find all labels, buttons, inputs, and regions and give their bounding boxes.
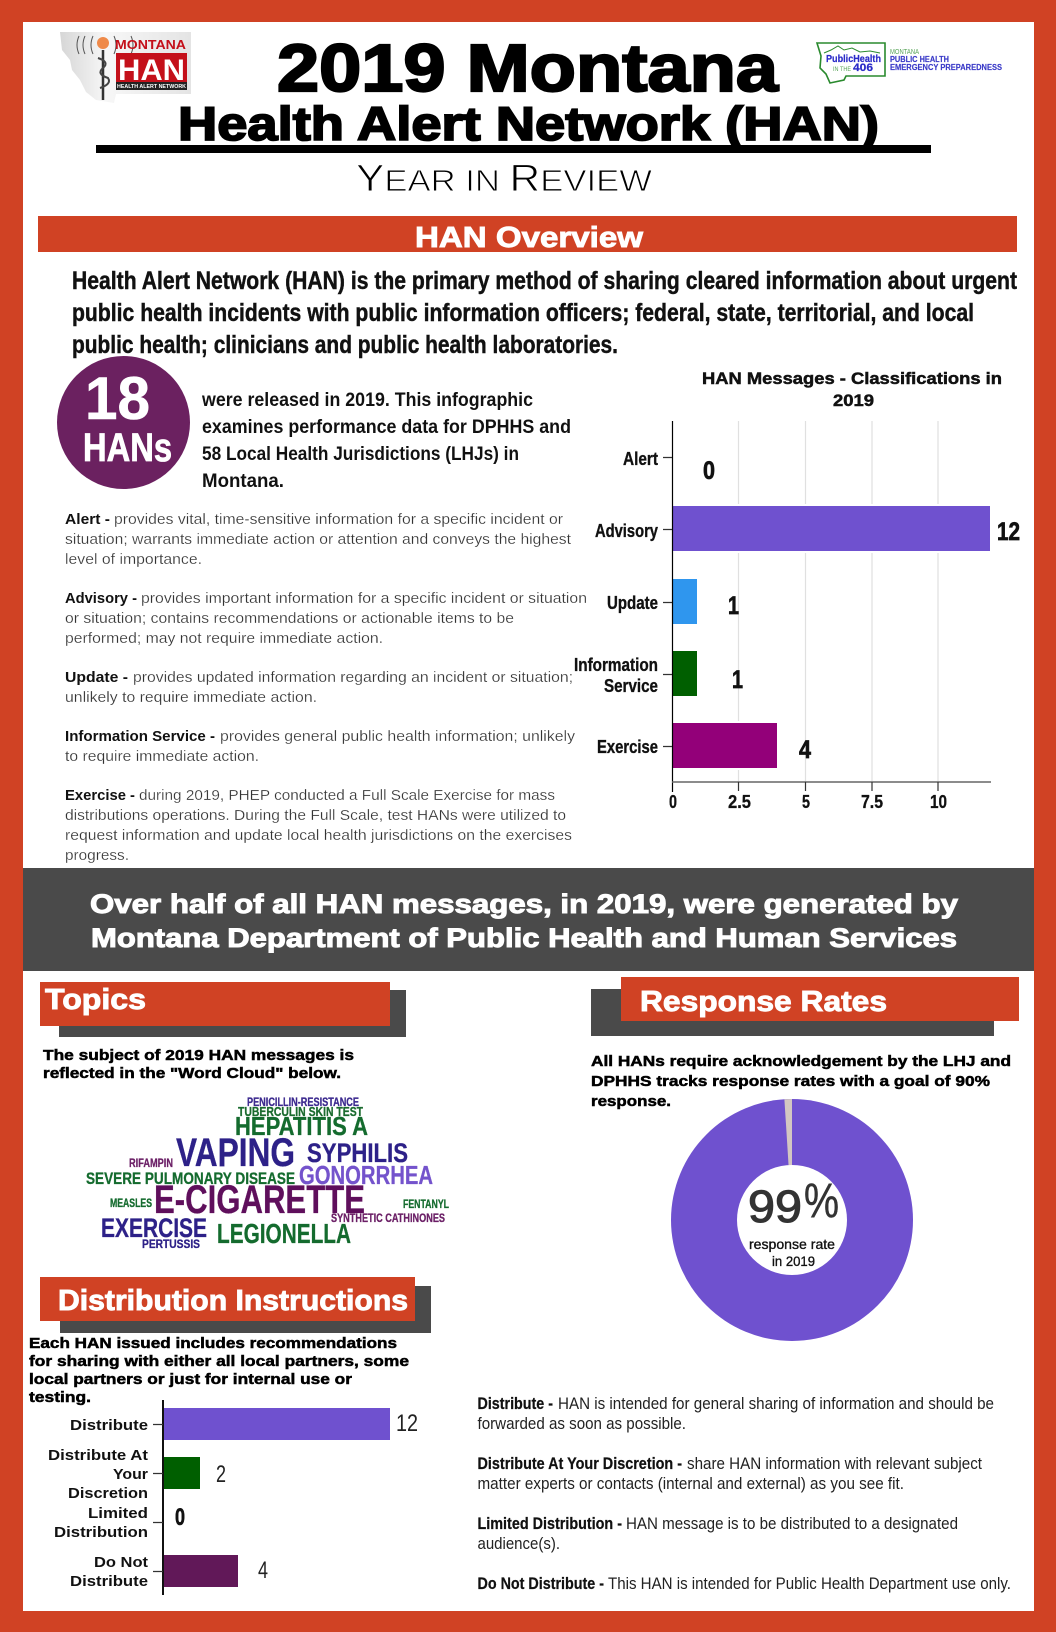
text block: distribution definitions: HAN is intended for general sharing of information and should be xyxy=(558,1394,994,1413)
logo: Montana HAN: HEALTH ALERT NETWORK xyxy=(117,84,186,90)
title: 2019 Montana: 2019 Montana xyxy=(277,31,779,106)
text block: distribution definitions: matter experts or contacts (internal and external) as you see fit. xyxy=(478,1474,904,1493)
logo: Public Health in the 406: PUBLIC HEALTH xyxy=(890,55,949,64)
bar: Distribute xyxy=(164,1408,390,1440)
word cloud: GONORRHEA xyxy=(299,1160,433,1190)
section heading: Distribution Instructions xyxy=(40,1277,431,1333)
definition: Exercise: during 2019, PHEP conducted a Full Scale Exercise for mass xyxy=(139,788,555,804)
section heading: Topics: Topics xyxy=(45,984,146,1016)
bar chart: distribution instructions: Distribution xyxy=(54,1524,148,1541)
text block: topics intro: The subject of 2019 HAN messages is xyxy=(43,1047,354,1064)
logo: Public Health in the 406: MONTANA xyxy=(890,49,919,56)
logo: Montana HAN: HAN xyxy=(118,54,185,87)
bar chart: distribution instructions: Your xyxy=(113,1466,148,1483)
bar chart: distribution instructions: 0 xyxy=(175,1504,185,1531)
word cloud: VAPING xyxy=(176,1131,295,1175)
definition: Advisory: performed; may not require immediate action. xyxy=(65,631,383,647)
bar chart: distribution instructions: Discretion xyxy=(68,1485,148,1502)
bar chart: distribution instructions: Distribute At xyxy=(48,1447,148,1464)
donut chart: 99% response rate: % xyxy=(804,1175,839,1228)
bar chart: HAN classifications: Alert xyxy=(623,448,658,469)
banner: over half of HAN messages: Over half of all HAN messages, in 2019, were generated by xyxy=(90,889,958,919)
section heading: HAN Overview xyxy=(38,216,1017,254)
bar chart: HAN classifications: 7.5 xyxy=(861,792,883,812)
logo: Public Health in the 406: EMERGENCY PREPAREDNESS xyxy=(890,63,1003,72)
bar: Distribute At Your Discretion xyxy=(164,1457,200,1489)
bar chart: distribution instructions: 4 xyxy=(258,1557,268,1584)
bar chart: HAN classifications: 4 xyxy=(799,736,811,764)
definition: Exercise xyxy=(65,788,572,864)
text block: response rates intro: DPHHS tracks response rates with a goal of 90% xyxy=(591,1073,990,1090)
definition: Update: Update - xyxy=(65,670,128,686)
section heading: Distribution Instructions: Distribution Instructions xyxy=(58,1285,408,1317)
logo: Public Health in the 406: 406 xyxy=(853,62,873,74)
text block: distribution definitions: Do Not Distribute - xyxy=(478,1574,604,1593)
bar chart: distribution instructions: 12 xyxy=(396,1410,418,1437)
definition: Advisory xyxy=(65,591,587,647)
text block: release summary xyxy=(201,390,571,492)
bar: Exercise xyxy=(673,723,777,768)
text block: distribution intro: local partners or just for internal use or xyxy=(29,1371,352,1388)
definition: Information Service: Information Service - xyxy=(65,729,215,745)
text block: distribution intro: Each HAN issued includes recommendations xyxy=(29,1335,397,1352)
bar chart: HAN classifications xyxy=(574,421,1020,812)
word cloud: SYNTHETIC CATHINONES xyxy=(331,1213,445,1225)
text block: distribution definitions: Distribute - xyxy=(478,1394,553,1413)
banner: over half of HAN messages: Montana Department of Public Health and Human Services xyxy=(91,923,957,953)
word cloud: PENICILLIN-RESISTANCE xyxy=(247,1095,359,1109)
chart title: HAN Messages classifications: 2019 xyxy=(833,391,874,410)
word cloud: SYPHILIS xyxy=(307,1138,408,1168)
text block: distribution intro xyxy=(29,1335,409,1406)
bar chart: HAN classifications: Information xyxy=(574,654,658,675)
word cloud: FENTANYL xyxy=(403,1199,449,1211)
word cloud: RIFAMPIN xyxy=(129,1156,173,1170)
text block: distribution intro: for sharing with either all local partners, some xyxy=(29,1353,409,1370)
section heading: Topics xyxy=(40,982,406,1037)
word cloud: EXERCISE xyxy=(101,1213,207,1243)
bar chart: HAN classifications: 12 xyxy=(997,518,1020,546)
logo: Public Health in the 406 xyxy=(817,43,1003,83)
donut chart: 99% response rate xyxy=(671,1099,913,1341)
donut chart: 99% response rate: response rate xyxy=(749,1236,835,1252)
bar chart: HAN classifications: 2.5 xyxy=(728,792,751,812)
bar chart: HAN classifications: Service xyxy=(604,675,658,696)
text block: distribution definitions: Limited Distribution - xyxy=(478,1514,622,1533)
bar chart: HAN classifications: Exercise xyxy=(597,736,658,757)
bar chart: HAN classifications: 1 xyxy=(732,666,743,694)
bar chart: distribution instructions xyxy=(48,1400,418,1595)
chart title: HAN Messages classifications: HAN Messages - Classifications in xyxy=(702,369,1002,388)
definition: Update: provides updated information regarding an incident or situation; xyxy=(133,670,573,686)
text block: distribution definitions xyxy=(478,1394,1011,1593)
definition: Alert xyxy=(65,512,571,568)
definition: Exercise: Exercise - xyxy=(65,788,135,804)
definition: Information Service: provides general public health information; unlikely xyxy=(220,729,576,745)
definition: Advisory: Advisory - xyxy=(65,591,137,607)
bar chart: distribution instructions: Distribute xyxy=(70,1417,148,1434)
word cloud: HEPATITIS A xyxy=(235,1111,368,1141)
bar: Advisory xyxy=(673,506,990,551)
word cloud: SEVERE PULMONARY DISEASE xyxy=(86,1169,295,1188)
bar: Do Not Distribute xyxy=(164,1555,238,1587)
word cloud: LEGIONELLA xyxy=(217,1218,351,1249)
definition: Alert: level of importance. xyxy=(65,552,202,568)
text block: distribution definitions: forwarded as soon as possible. xyxy=(478,1414,686,1433)
word cloud: PERTUSSIS xyxy=(142,1237,200,1251)
bar chart: HAN classifications: 0 xyxy=(669,792,677,812)
definition: Alert: situation; warrants immediate action or attention and conveys the highest xyxy=(65,532,571,548)
definition: Update: unlikely to require immediate action. xyxy=(65,690,317,706)
definition: Advisory: provides important information for a specific incident or situation xyxy=(141,591,587,607)
donut chart: 99% response rate: in 2019 xyxy=(772,1253,815,1269)
word cloud: TUBERCULIN SKIN TEST xyxy=(238,1104,363,1119)
bar chart: distribution instructions: Distribute xyxy=(70,1573,148,1590)
text block: response rates intro: All HANs require acknowledgement by the LHJ and xyxy=(591,1053,1011,1070)
text block: topics intro: reflected in the "Word Cloud" below. xyxy=(43,1065,341,1082)
bar chart: HAN classifications: 0 xyxy=(703,457,715,485)
text block: distribution definitions: audience(s). xyxy=(478,1534,560,1553)
definition: Information Service xyxy=(65,729,576,765)
text block: distribution definitions: This HAN is intended for Public Health Department use only. xyxy=(608,1574,1011,1593)
bar: Update xyxy=(673,579,697,624)
logo: Public Health in the 406: PublicHealth xyxy=(826,54,881,65)
bar chart: HAN classifications: Advisory xyxy=(595,520,659,541)
definition: Exercise: progress. xyxy=(65,848,129,864)
subtitle: Year in Review: YEAR IN REVIEW xyxy=(356,158,653,200)
definition: Advisory: or situation; contains recommendations or actionable items to be xyxy=(65,611,514,627)
text block: distribution intro: testing. xyxy=(29,1389,91,1406)
bar chart: HAN classifications: 10 xyxy=(930,792,947,812)
bar chart: distribution instructions: Limited xyxy=(88,1505,148,1522)
text block: HAN definition xyxy=(72,267,1018,359)
logo: Public Health in the 406: IN THE xyxy=(833,67,851,73)
section heading: Response Rates xyxy=(591,977,1019,1036)
bar chart: HAN classifications: Update xyxy=(607,592,658,613)
section heading: Response Rates: Response Rates xyxy=(640,986,887,1018)
definition: Information Service: to require immediate action. xyxy=(65,749,259,765)
word cloud: E-CIGARETTE xyxy=(154,1178,365,1222)
text block: topics intro xyxy=(43,1047,354,1082)
section heading: HAN Overview: HAN Overview xyxy=(415,222,644,254)
text block: release summary: examines performance data for DPHHS and xyxy=(202,417,571,438)
definition: Alert: Alert - xyxy=(65,512,110,528)
text block: distribution definitions: HAN message is to be distributed to a designated xyxy=(626,1514,958,1533)
logo: Montana HAN: MONTANA xyxy=(115,37,187,52)
text block: response rates intro xyxy=(591,1053,1011,1110)
title: Health Alert Network (HAN): Health Alert Network (HAN) xyxy=(178,97,879,150)
callout: 18 HANs xyxy=(57,356,190,489)
donut chart: 99% response rate: 99 xyxy=(748,1181,802,1232)
bar chart: distribution instructions: 2 xyxy=(216,1461,226,1488)
definition: Alert: provides vital, time-sensitive information for a specific incident or xyxy=(114,512,563,528)
word cloud: MEASLES xyxy=(110,1198,152,1210)
text block: release summary: were released in 2019. This infographic xyxy=(201,390,533,411)
definition: Exercise: distributions operations. During the Full Scale, test HANs were utilized to xyxy=(65,808,566,824)
definition: Update xyxy=(65,670,573,706)
callout: 18 HANs: 18 xyxy=(85,365,150,432)
text block: distribution definitions: Distribute At Your Discretion - xyxy=(478,1454,682,1473)
text block: HAN definition: public health; clinicians and public health laboratories. xyxy=(72,331,618,359)
text block: response rates intro: response. xyxy=(591,1093,671,1110)
callout: 18 HANs: HANs xyxy=(83,426,172,470)
logo: Montana HAN xyxy=(60,32,191,103)
bar chart: HAN classifications: 5 xyxy=(802,792,810,812)
bar chart: HAN classifications: 1 xyxy=(728,592,739,620)
word cloud xyxy=(86,1095,449,1251)
definition: Exercise: request information and update local health jurisdictions on the exercises xyxy=(65,828,572,844)
chart title: HAN Messages classifications xyxy=(702,369,1002,410)
text block: release summary: Montana. xyxy=(202,471,284,492)
text block: release summary: 58 Local Health Jurisdictions (LHJs) in xyxy=(202,444,519,465)
bar chart: distribution instructions: Do Not xyxy=(94,1554,148,1571)
banner: over half of HAN messages xyxy=(23,868,1034,971)
text block: distribution definitions: share HAN information with relevant subject xyxy=(687,1454,982,1473)
bar: Information Service xyxy=(673,651,697,696)
